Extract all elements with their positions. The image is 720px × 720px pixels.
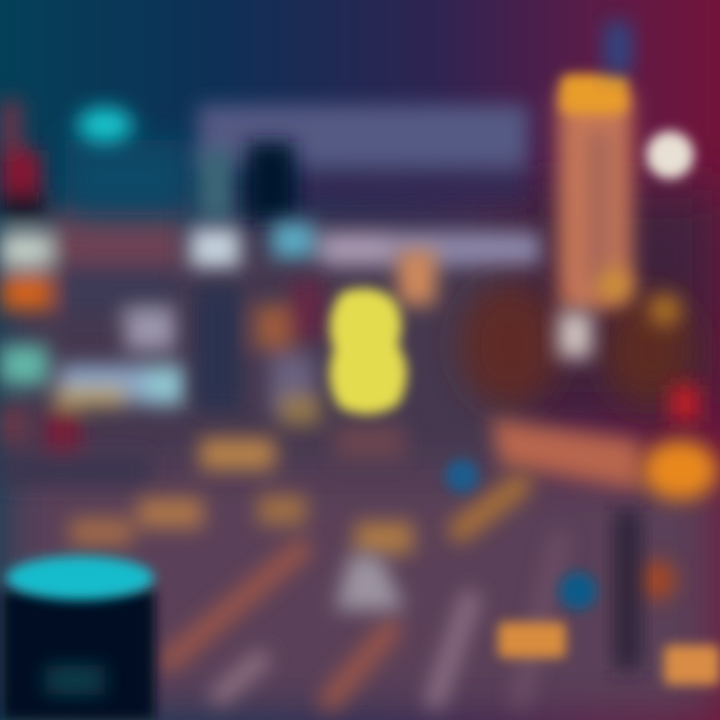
cylinder top — [6, 556, 154, 600]
bitcoin symbol — [329, 288, 407, 414]
left skyscrapers — [0, 100, 185, 485]
tower spire — [605, 22, 631, 74]
bitcoin coin body — [329, 288, 407, 414]
orange sign — [498, 622, 566, 658]
road band — [490, 418, 640, 490]
white vehicle — [335, 555, 405, 610]
cylinder glow — [45, 665, 105, 695]
orange glow — [642, 440, 718, 500]
blurred headline block — [198, 105, 528, 200]
blue circle lower — [559, 572, 597, 610]
tower — [558, 90, 632, 310]
tower top light — [560, 74, 628, 114]
cylinder body — [2, 590, 155, 720]
pale tower — [198, 150, 234, 220]
dark tower silhouette — [247, 142, 295, 220]
trees — [460, 283, 696, 407]
blurred subheading band — [190, 222, 540, 268]
city ground haze — [0, 190, 720, 720]
warm lights near tower — [599, 269, 681, 326]
tower base light — [558, 312, 592, 358]
teal glow and building top left — [65, 140, 190, 215]
red orange light — [637, 560, 677, 600]
moon — [646, 131, 694, 179]
red light — [670, 385, 700, 421]
blue circle — [445, 459, 479, 493]
streets — [170, 485, 560, 700]
dark right column — [615, 510, 640, 670]
street cars — [70, 438, 413, 554]
cyan light — [77, 107, 133, 143]
orange sign right — [664, 645, 720, 685]
central mid buildings — [195, 250, 436, 460]
